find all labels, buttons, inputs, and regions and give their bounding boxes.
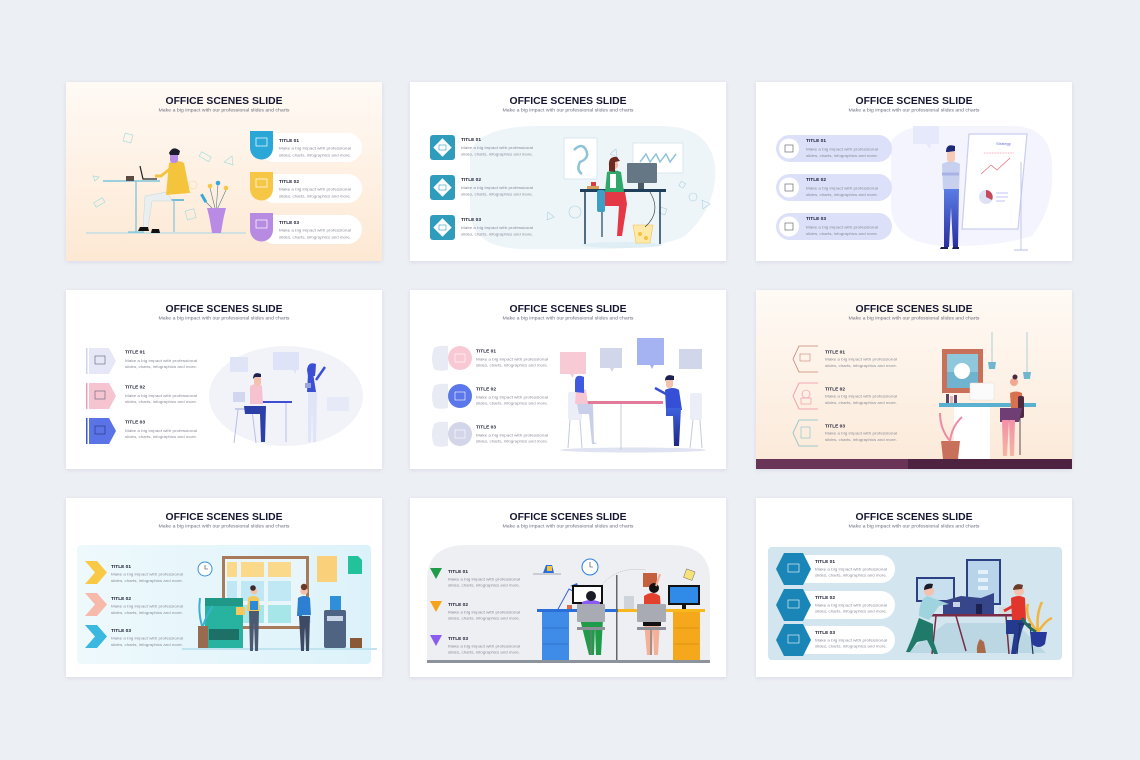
slide 4: meeting with standing woman — [66, 290, 382, 469]
title: OFFICE SCENES SLIDE — [856, 303, 972, 315]
item 02: Make a big impact with professional — [476, 396, 548, 400]
item 01: Make a big impact with professional — [111, 572, 183, 576]
item 02: TITLE 02 — [111, 596, 131, 602]
item 01: TITLE 01 — [815, 559, 835, 565]
illustration: seated man and presenting woman — [209, 346, 363, 446]
item 01: slides, charts, infographics and more. — [476, 364, 548, 368]
item 01: Make a big impact with professional — [448, 578, 520, 582]
item 02: slides, charts, infographics and more. — [461, 192, 533, 196]
item 02: TITLE 02 — [125, 384, 145, 390]
slide 3: strategy presentation — [756, 82, 1072, 261]
subtitle: Make a big impact with our professional slides and charts — [848, 108, 980, 112]
item 03: Make a big impact with professional — [461, 226, 533, 230]
item 01: TITLE 01 — [825, 350, 845, 356]
item 01 — [86, 348, 197, 374]
item 03: slides, charts, infographics and more. — [825, 438, 897, 442]
title: OFFICE SCENES SLIDE — [856, 95, 972, 107]
item 01: TITLE 01 — [448, 569, 468, 575]
slide 7: office with copier and window — [66, 498, 382, 677]
item 02: TITLE 02 — [461, 177, 481, 183]
item 03: TITLE 03 — [125, 420, 145, 426]
item 01: slides, charts, infographics and more. — [461, 152, 533, 156]
item 03: Make a big impact with professional — [111, 636, 183, 640]
item 02: Make a big impact with professional — [461, 186, 533, 190]
illustration: office scene — [182, 556, 377, 651]
item 03: TITLE 03 — [279, 220, 299, 226]
item 01: Make a big impact with professional — [806, 148, 878, 152]
item 01: Make a big impact with professional — [279, 146, 351, 150]
item 01: TITLE 01 — [125, 350, 145, 356]
item 02: slides, charts, infographics and more. — [815, 610, 887, 614]
illustration: two workers at desks — [533, 559, 705, 660]
background panel — [768, 547, 1062, 660]
item 01: Make a big impact with professional — [476, 358, 548, 362]
item 01: TITLE 01 — [111, 564, 131, 570]
title: OFFICE SCENES SLIDE — [166, 511, 282, 523]
item 02 — [793, 383, 897, 409]
item 01: slides, charts, infographics and more. — [806, 154, 878, 158]
item 01 — [776, 135, 892, 162]
item 02: slides, charts, infographics and more. — [111, 611, 183, 615]
item 01: slides, charts, infographics and more. — [125, 365, 197, 369]
item 03 — [432, 422, 548, 447]
item 03: Make a big impact with professional — [125, 429, 197, 433]
item 03 — [86, 418, 197, 444]
title: OFFICE SCENES SLIDE — [166, 95, 282, 107]
item 01: Make a big impact with professional — [825, 358, 897, 362]
slide 1: laptop at table — [66, 82, 382, 261]
illustration: woman at desk — [547, 138, 710, 248]
subtitle: Make a big impact with our professional slides and charts — [502, 108, 634, 112]
illustration: model house meeting — [906, 559, 1052, 654]
item 02 — [430, 175, 533, 200]
item 01 — [430, 568, 520, 588]
background panel — [77, 545, 371, 664]
subtitle: Make a big impact with our professional slides and charts — [158, 316, 290, 320]
slide 2: woman at computer desk — [410, 82, 726, 261]
item 01 — [793, 346, 897, 372]
item 01: Make a big impact with professional — [461, 146, 533, 150]
slide 9: architects with model house — [756, 498, 1072, 677]
item 02: TITLE 02 — [448, 602, 468, 608]
item 01: slides, charts, infographics and more. — [111, 579, 183, 583]
title: OFFICE SCENES SLIDE — [510, 95, 626, 107]
illustration: man with laptop — [86, 133, 246, 233]
item 01: slides, charts, infographics and more. — [825, 364, 897, 368]
item 02: slides, charts, infographics and more. — [448, 616, 520, 620]
subtitle: Make a big impact with our professional slides and charts — [502, 316, 634, 320]
item 01 — [85, 561, 183, 584]
item 01 — [430, 135, 533, 160]
subtitle: Make a big impact with our professional slides and charts — [158, 108, 290, 112]
illustration: man with strategy board: Strategy — [996, 141, 1011, 146]
item 02: slides, charts, infographics and more. — [825, 401, 897, 405]
item 02: TITLE 02 — [815, 595, 835, 601]
item 03: TITLE 03 — [461, 217, 481, 223]
background panel — [427, 545, 710, 663]
item 03: slides, charts, infographics and more. — [806, 232, 878, 236]
item 03: TITLE 03 — [806, 216, 826, 222]
item 03: Make a big impact with professional — [448, 644, 520, 648]
background blob — [470, 126, 715, 249]
slide 8: shared office desks — [410, 498, 726, 677]
floor bar — [756, 459, 1072, 469]
item 03: slides, charts, infographics and more. — [125, 435, 197, 439]
item 03 — [430, 215, 533, 240]
item 01 — [250, 131, 362, 162]
item 01 — [776, 553, 895, 585]
item 01: TITLE 01 — [806, 138, 826, 144]
item 03 — [793, 420, 897, 446]
title: OFFICE SCENES SLIDE — [510, 303, 626, 315]
item 03: Make a big impact with professional — [815, 638, 887, 642]
item 01: TITLE 01 — [476, 348, 496, 354]
background blob — [891, 126, 1052, 246]
item 02: Make a big impact with professional — [448, 610, 520, 614]
item 02: Make a big impact with professional — [125, 394, 197, 398]
subtitle: Make a big impact with our professional slides and charts — [502, 524, 634, 528]
item 01: Make a big impact with professional — [125, 359, 197, 363]
item 01: slides, charts, infographics and more. — [448, 584, 520, 588]
item 02: TITLE 02 — [476, 386, 496, 392]
item 03 — [776, 624, 895, 656]
item 02 — [85, 593, 183, 616]
illustration: conversation — [560, 338, 706, 452]
item 02 — [250, 172, 362, 203]
item 03: slides, charts, infographics and more. — [111, 643, 183, 647]
item 02: slides, charts, infographics and more. — [125, 400, 197, 404]
item 01: slides, charts, infographics and more. — [815, 574, 887, 578]
illustration: man with strategy board — [913, 126, 1028, 250]
item 03: Make a big impact with professional — [806, 226, 878, 230]
item 03 — [776, 213, 892, 240]
subtitle: Make a big impact with our professional slides and charts — [848, 524, 980, 528]
item 01: Make a big impact with professional — [815, 568, 887, 572]
item 02: TITLE 02 — [825, 386, 845, 392]
item 02: Make a big impact with professional — [815, 604, 887, 608]
item 03: slides, charts, infographics and more. — [461, 232, 533, 236]
item 01: TITLE 01 — [461, 137, 481, 143]
item 03: Make a big impact with professional — [279, 228, 351, 232]
item 02: Make a big impact with professional — [279, 188, 351, 192]
item 03: TITLE 03 — [825, 424, 845, 430]
item 03 — [250, 213, 362, 244]
item 03: slides, charts, infographics and more. — [815, 644, 887, 648]
item 02: Make a big impact with professional — [825, 394, 897, 398]
subtitle: Make a big impact with our professional slides and charts — [158, 524, 290, 528]
item 01 — [432, 346, 548, 371]
item 03: TITLE 03 — [815, 630, 835, 636]
title: OFFICE SCENES SLIDE — [856, 511, 972, 523]
item 02 — [776, 589, 895, 621]
subtitle: Make a big impact with our professional slides and charts — [848, 316, 980, 320]
item 03: slides, charts, infographics and more. — [279, 236, 351, 240]
item 02: slides, charts, infographics and more. — [806, 193, 878, 197]
item 03 — [430, 635, 520, 654]
item 01: TITLE 01 — [279, 138, 299, 144]
item 02: slides, charts, infographics and more. — [476, 402, 548, 406]
slide 5: two people at table with speech bubbles — [410, 290, 726, 469]
item 03: TITLE 03 — [448, 636, 468, 642]
item 02 — [86, 383, 197, 409]
item 02 — [430, 601, 520, 620]
item 02: Make a big impact with professional — [111, 604, 183, 608]
illustration: woman at desk with lamps — [939, 332, 1036, 459]
item 03: Make a big impact with professional — [825, 432, 897, 436]
item 01: slides, charts, infographics and more. — [279, 154, 351, 158]
item 02: Make a big impact with professional — [806, 186, 878, 190]
item 03: slides, charts, infographics and more. — [476, 440, 548, 444]
title: OFFICE SCENES SLIDE — [510, 511, 626, 523]
item 03 — [85, 625, 183, 648]
item 02: slides, charts, infographics and more. — [279, 194, 351, 198]
slide 6: woman at desk, warm scene — [756, 290, 1072, 469]
item 03: TITLE 03 — [111, 628, 131, 634]
item 02: TITLE 02 — [806, 177, 826, 183]
title: OFFICE SCENES SLIDE — [166, 303, 282, 315]
item 02: TITLE 02 — [279, 179, 299, 185]
item 02 — [432, 384, 548, 409]
item 03: slides, charts, infographics and more. — [448, 650, 520, 654]
item 03: Make a big impact with professional — [476, 434, 548, 438]
item 02 — [776, 174, 892, 201]
item 03: TITLE 03 — [476, 424, 496, 430]
